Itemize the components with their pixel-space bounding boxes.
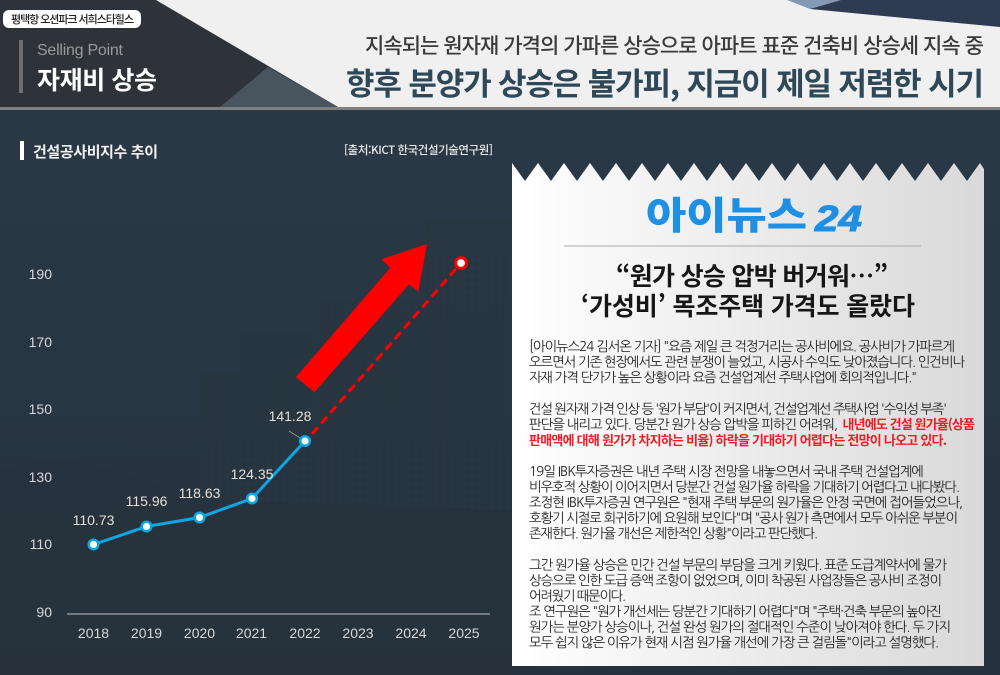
headline [346,30,984,104]
header: dark title block [0,0,338,107]
article body: 조정현 IBK투자증권 연구원은 "현재 주택 부문의 원가율은 안정 국면에 접어들었으나, [529,495,963,509]
background photo: apartment buildings [0,222,510,675]
data values: 124.35 [231,466,274,482]
projected point [456,258,466,268]
section title block: 자재비 상승 [37,61,157,97]
chart heading: 건설공사비지수 추이 [33,141,158,162]
news logo: 24 [814,198,862,239]
header: bottom rule [0,107,1000,110]
line chart [29,258,490,641]
torn paper background [512,163,984,666]
article body: 건설 원자재 가격 인상 등 '원가 부담'이 커지면서, 건설업계선 주택사업 '수익성 부족' [529,402,947,416]
article headline: ‘가성비’ 목조주택 가격도 올랐다 [581,287,915,323]
data values: 110.73 [73,512,115,528]
article body [529,339,975,649]
headline: 지속되는 원자재 가격의 가파른 상승으로 아파트 표준 건축비 상승세 지속 중 [365,30,984,60]
y axis labels [29,266,52,620]
y axis labels: 190 [29,266,52,282]
headline: 향후 분양가 상승은 불가피, 지금이 제일 저렴한 시기 [346,59,984,104]
location badge: 평택항 오션파크 서희스타힐스 [11,11,134,27]
header: light background [0,0,1000,107]
section title block: Selling Point [37,42,124,59]
chart source: [출처:KICT 한국건설기술연구원] [344,142,493,158]
x axis labels: 2019 [131,625,162,641]
article headline: “원가 상승 압박 버거워…” [616,257,888,293]
x axis labels: 2020 [184,625,215,641]
news logo: 아이뉴스 [646,185,807,240]
article body: 19일 IBK투자증권은 내년 주택 시장 전망을 내놓으면서 국내 주택 건설업계에 [529,464,924,478]
article body: 판단을 내리고 있다. 당분간 원가 상승 압박을 피하긴 어려워, [529,417,838,431]
article body: 비우호적 상황이 이어지면서 당분간 건설 원가율 하락을 기대하기 어렵다고 내다봤다. [529,480,960,494]
x axis labels: 2023 [342,625,374,641]
data values: 118.63 [179,485,221,501]
data points [89,436,310,549]
article body: 상승으로 인한 도급 증액 조항이 없었으며, 이미 착공된 사업장들은 공사비 조정이 [529,573,942,587]
x axis labels [78,625,480,641]
article body: [아이뉴스24 김서온 기자] "요즘 제일 큰 걱정거리는 공사비에요. 공사비가 가파르게 [529,339,955,353]
y axis labels: 90 [36,604,52,620]
y axis labels: 130 [29,469,52,485]
panel: news article [512,163,984,666]
projection line [312,263,461,434]
data values: 141.28 [269,408,312,424]
article body: 원가는 분양가 상승이나, 건설 완성 원가의 절대적인 수준이 낮아져야 한다. 두 가지 [529,620,951,634]
y axis labels: 150 [29,401,52,417]
header: slate triangle [220,67,338,107]
data values [73,408,312,528]
x axis labels: 2025 [448,625,480,641]
data values: 115.96 [126,493,168,509]
article body: 내년에도 건설 원가율(상품 [842,414,975,433]
section title block [19,40,157,97]
article body: 존재한다. 원가율 개선은 제한적인 상황"이라고 판단했다. [529,526,818,540]
x axis labels: 2024 [395,625,427,641]
article headline [581,257,915,323]
article body: 판매액에 대해 원가가 차지하는 비율) 하락을 기대하기 어렵다는 전망이 나오고 있다. [529,430,947,449]
article body: 어려웠기 때문이다. [529,588,626,602]
article body: 조 연구원은 "원가 개선세는 당분간 기대하기 어렵다"며 "주택·건축 부문의 높아진 [529,604,942,618]
y axis labels: 170 [29,334,52,350]
news logo [646,185,862,240]
x axis labels: 2022 [289,625,321,641]
article body: 자재 가격 단가가 높은 상황이라 요즘 건설업계선 주택사업에 회의적입니다." [529,370,917,384]
red rising arrow [296,244,427,392]
y axis labels: 110 [30,536,52,552]
article body: 호황기 시절로 회귀하기에 요원해 보인다"며 "공사 원가 측면에서 모두 아쉬운 부분이 [529,510,958,524]
x axis labels: 2018 [78,625,109,641]
article body: 오르면서 기존 현장에서도 관련 분쟁이 늘었고, 시공사 수익도 낮아졌습니다. 인건비나 [529,354,965,368]
x axis labels: 2021 [236,625,267,641]
data line [94,441,305,544]
article body: 모두 쉽지 않은 이유가 현재 시점 원가율 개선에 가장 큰 걸림돌"이라고 설명했다. [529,635,939,649]
header: top right corner accent [787,0,1000,27]
article body: 그간 원가율 상승은 민간 건설 부문의 부담을 크게 키웠다. 표준 도급계약서에 물가 [529,558,947,572]
